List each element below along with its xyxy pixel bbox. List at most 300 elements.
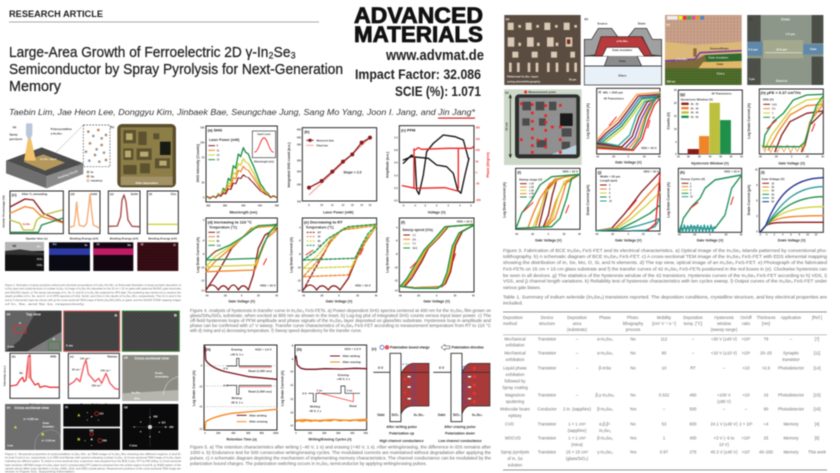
figure 4c: PFM loops: -50 bbox=[476, 182, 480, 185]
figure 3c: EDS cross-section: Gate insulator bbox=[708, 55, 729, 59]
figure 1i: Se elemental map: (i) bbox=[97, 242, 99, 246]
table row 3: Spray coating bbox=[502, 385, 528, 390]
figure 3g: hysteresis window histogram: 35 bbox=[698, 156, 701, 159]
figure 4e: decreasing temperature transfer curves: 20 bbox=[356, 294, 360, 297]
table row 8: Spray pyrolysis bbox=[501, 450, 529, 454]
figure 4e: decreasing temperature transfer curves: -14 bbox=[297, 290, 301, 293]
figure 4c: PFM loops: 200 bbox=[476, 126, 480, 129]
figure 4b: log-log SHG counts: 200 bbox=[297, 184, 302, 187]
figure 4e: decreasing temperature transfer curves: -4 bbox=[298, 226, 301, 229]
figure 4d: increasing temperature transfer curves: Log Drain Current (A) bbox=[196, 237, 200, 273]
figure 4e: decreasing temperature transfer curves: Temperature (°C) bbox=[306, 225, 334, 229]
figure 1j: O elemental map: O bbox=[173, 243, 176, 247]
figure 1f: O 1s XPS spectrum: (f) bbox=[149, 192, 152, 196]
figure 4c: PFM loops: Phase (Degree) bbox=[486, 152, 490, 178]
figure 3d: optical top view: (d) bbox=[749, 17, 752, 21]
device: after erasing pulse: In₂Se₃ bbox=[472, 413, 483, 417]
figure 4c: PFM loops: 0.2 bbox=[394, 187, 398, 190]
figure 3i: sweep range dependence: 0 bbox=[548, 233, 550, 236]
figure 3j: channel length dependence: VDS = 10 V bbox=[643, 169, 659, 173]
figure 2d: cross-sectional view: Grain bbox=[155, 371, 163, 375]
figure 4f: sweep speed transfer curves: -6 bbox=[395, 240, 398, 243]
figure 5a: retention chart: 0 V bbox=[223, 366, 228, 370]
figure 4b: log-log SHG counts: 400 bbox=[297, 144, 302, 147]
figure 4d: increasing temperature transfer curves: 40 bbox=[275, 294, 279, 297]
figure 4f: sweep speed transfer curves: -4 bbox=[395, 226, 398, 229]
table row 5: epitaxy bbox=[508, 413, 523, 418]
device: after erasing pulse: 0 V bbox=[439, 366, 445, 370]
table row 6: Transistor bbox=[538, 422, 557, 426]
figure 3e: measurement points photo: Measurement point bbox=[528, 90, 556, 94]
figure 4 caption: with d) rising and e) decreasing temperature. f) Sweep speed dependency for the transfer curve. bbox=[190, 328, 362, 333]
table row 8: 15 × 15 cm² bbox=[566, 450, 589, 454]
panel: figure 1 bbox=[2, 123, 181, 306]
figure 3l: output curves: 0 bbox=[756, 230, 758, 233]
figure 1i: Se elemental map: Se bbox=[127, 243, 131, 247]
figure 3g: hysteresis window histogram: 5 bbox=[675, 141, 677, 144]
figure 3c: EDS cross-section: Glass bbox=[717, 72, 725, 76]
figure 2g: SAED pattern: (g) bbox=[124, 405, 128, 409]
figure 3g: hysteresis window histogram: 35 - 40 bbox=[691, 107, 699, 110]
figure 3c: EDS cross-section: Source/Drain bbox=[710, 46, 729, 50]
figure 5 caption bbox=[190, 444, 492, 466]
figure 2 caption: Figure 2. Structural properties of polycrystalline In₂Se₃ film. a) TEM image of In₂Se₃ film showing two different regions, A and B, bbox=[5, 452, 181, 456]
panel: figure 5 bbox=[190, 344, 492, 466]
table row 2: exfoliation bbox=[506, 357, 525, 362]
bars bbox=[688, 103, 731, 154]
table row 7: [5] bbox=[815, 436, 819, 440]
figure 3l: output curves: 60 bbox=[771, 201, 775, 204]
figure 4a: SHG spectra bbox=[196, 126, 279, 215]
figure 4d: increasing temperature transfer curves: (d) Increasing to 110 °C bbox=[208, 220, 252, 225]
figure 3h: drain voltage dependence: 0.1 bbox=[772, 108, 776, 111]
figure 2e: HRTEM cross-section: Grain bbox=[43, 422, 50, 425]
table row 2 bbox=[504, 350, 820, 362]
figure 4b: log-log SHG counts bbox=[287, 128, 377, 215]
figure 4b: log-log SHG counts: Integrated SHG count (a.u.) bbox=[287, 142, 291, 188]
figure 3b: device structure schematic: Source bbox=[597, 22, 608, 26]
figure 3l: output curves: 30 bbox=[771, 190, 775, 193]
figure 4b: log-log SHG counts: 12 bbox=[342, 204, 345, 207]
figure 4d: increasing temperature transfer curves: 20 bbox=[257, 294, 260, 297]
figure 4a: SHG spectra: 11 bbox=[217, 149, 220, 152]
figure 5 caption: pulses. c) A schematic diagram depicting the mechanism of implementing memory characteristics. The channel conductance can be modulated by the bbox=[190, 456, 492, 460]
figure 5a: retention chart: 0 bbox=[204, 432, 206, 435]
table header: Application bbox=[781, 315, 802, 320]
figure 4b: log-log SHG counts: 11 bbox=[331, 204, 334, 207]
figure 2c: Raman chart bbox=[68, 353, 119, 407]
figure 3h: drain voltage dependence: 1 bbox=[772, 112, 774, 115]
figure 3f: transfer curves of 42 transistors: 40 bbox=[658, 156, 661, 159]
figure 5b: endurance chart: Erasing bbox=[338, 373, 349, 377]
figure 3h: drain voltage dependence: (h) μFE = 0.37 cm²/Vs bbox=[761, 90, 802, 95]
table header: process bbox=[626, 327, 640, 332]
figure 3l: output curves: 10 bbox=[806, 234, 810, 237]
figure 4d: increasing temperature transfer curves: VDS = 10 V bbox=[260, 284, 276, 288]
figure 4e: decreasing temperature transfer curves: (e) Decreasing to RT bbox=[304, 220, 343, 225]
figure 4f: sweep speed transfer curves: 7.1 bbox=[412, 243, 416, 246]
figure 1a: spray pyrolysis schematic: vacancy bbox=[91, 179, 103, 183]
figure 4e: decreasing temperature transfer curves: -20 bbox=[320, 294, 324, 297]
table row 2: Synaptic bbox=[783, 350, 799, 356]
table row 4: Transistor bbox=[538, 392, 557, 398]
table header: area bbox=[573, 321, 582, 326]
figure 4c: PFM loops: 0.8 bbox=[394, 149, 398, 152]
inset: input laser bbox=[252, 131, 276, 163]
figure 5 caption: 1000 s. b) Endurance test for 500 consecutive writing/erasing cycles. The modulated currents are maintained without degradation after applying the bbox=[190, 450, 492, 455]
table row 3: Liquid phase bbox=[503, 366, 528, 370]
table row 3 bbox=[502, 366, 820, 390]
figure 5 caption: Figure 5. a) The retention characteristics after writing (−40 V, 1 s) and erasing (+40 V, 1 s). After writing/erasing, the difference in IDS remains after bbox=[190, 444, 492, 450]
table row 2: α-In₂Se₃ bbox=[597, 350, 613, 356]
figure 2e: HRTEM cross-section: A bbox=[14, 425, 17, 430]
table header bbox=[503, 315, 822, 332]
figure 4c: PFM loops: (c) PFM bbox=[401, 128, 416, 133]
figure 3j: channel length dependence: Gate Voltage (V) bbox=[615, 239, 642, 243]
table row 1: exfoliation bbox=[506, 342, 525, 348]
device: after erasing pulse: Gate bbox=[438, 413, 446, 417]
figure 2a: top-view TEM with regions: B bbox=[53, 337, 56, 341]
figure 4e: decreasing temperature transfer curves: -6 bbox=[298, 240, 301, 243]
figure 4b: log-log SHG counts: 9 bbox=[308, 204, 310, 207]
table row 3: No bbox=[630, 366, 636, 370]
figure 4a: SHG spectra: 9 bbox=[217, 145, 219, 148]
figure 4a: SHG spectra: 150 bbox=[200, 126, 205, 129]
table row 6: (sapphire) bbox=[568, 428, 587, 433]
table row 6: Memory bbox=[783, 422, 799, 426]
figure 2f: FFT patterns A and B bbox=[63, 404, 120, 450]
figure 4 caption: Figure 4. Analysis of hysteresis in transfer curve in In₂Se₃ FeS-FETs. a) Power-dependent SHG spectra centered at 400 nm for the In₂Se₃ film grown on bbox=[190, 308, 492, 313]
figure 1h: In elemental map: In bbox=[85, 243, 87, 247]
table row 4: Magnetron bbox=[505, 392, 526, 398]
table header: (substrate) bbox=[567, 327, 588, 332]
figure 4f: sweep speed transfer curves: -8 bbox=[395, 253, 398, 256]
figure 5b: endurance chart: -40 V, 1 s bbox=[309, 409, 322, 413]
figure 3f: transfer curves of 42 transistors bbox=[586, 88, 661, 165]
table header: Mobility bbox=[657, 315, 672, 320]
figure 5a: retention chart: 800 bbox=[260, 432, 264, 435]
figure 2e: HRTEM cross-section: boundary bbox=[43, 425, 55, 428]
figure 2a: top-view TEM with regions: A bbox=[19, 321, 22, 325]
table row 6: 24.1 V (±40 V) bbox=[711, 422, 738, 426]
panel: figure 3 bbox=[503, 15, 828, 290]
figure 2e: HRTEM cross-section: B bbox=[41, 431, 44, 436]
figure 3j: channel length dependence: -40 bbox=[595, 233, 599, 236]
table row 2: Mechanical bbox=[504, 350, 526, 356]
figure 3i: sweep range dependence bbox=[503, 168, 581, 243]
figure 1d: In 3d XPS spectrum: In3d bbox=[91, 192, 97, 196]
figure 4c: PFM loops: 2 bbox=[448, 205, 450, 208]
figure 5a: retention chart bbox=[192, 345, 279, 442]
table row 4: β,γ-In₂Se₃ bbox=[595, 392, 615, 398]
figure 1 caption: depth profiles of In, Se, and O. d–f) XPS spectra of In3d, Se3d, and O1s in the depth of In₂Se₃ film, respectively. The h) In and i) Se bbox=[5, 294, 181, 298]
figure 3b: device structure schematic: γ-In₂Se₃ bbox=[616, 39, 629, 43]
figure 5a: retention chart: After erasing bbox=[249, 420, 268, 424]
figure 3h: drain voltage dependence: 0 bbox=[791, 156, 793, 159]
figure 1j: O elemental map: (j) bbox=[141, 242, 143, 246]
figure 3l: output curves: 20 bbox=[771, 186, 775, 189]
figure 1c: atomic percentage chart bbox=[2, 191, 63, 241]
table row 5: 2 in. (sapphire) bbox=[563, 406, 592, 412]
table caption bbox=[503, 294, 828, 306]
figure 2d: cross-sectional view: (d) bbox=[124, 356, 128, 360]
figure 3j: channel length dependence: 8 bbox=[609, 196, 611, 199]
figure 3j: channel length dependence: Length (μm) bbox=[600, 178, 617, 182]
figure 3i: sweep range dependence: ± 50 bbox=[529, 196, 534, 199]
figure 3l: output curves: 0 bbox=[766, 234, 768, 237]
figure 4 caption: phase can be confirmed with ±7 V sweep. Transfer curve characteristics of In₂Se₃ FeS-FET according to measurement temperature from RT to 110 °C bbox=[190, 323, 491, 328]
figure 2e: HRTEM cross-section: 5 nm bbox=[7, 445, 14, 448]
figure 1g: cross-sectional TEM: SiO₂ bbox=[37, 257, 44, 261]
figure 3f: transfer curves of 42 transistors: 20 bbox=[643, 156, 646, 159]
figure 5a: retention chart: 400 bbox=[231, 432, 236, 435]
figure 1c: atomic percentage chart: (c) bbox=[12, 192, 17, 197]
figure 2 caption: for both 5 and 2 nm, respectively. b,c) XRD and Raman with spectra indicating a phase In₂Se₃. d) Cross-sectional TEM image of In₂Se₃ layer bbox=[5, 456, 181, 460]
table row 5: Conductor bbox=[537, 406, 557, 412]
figure 4c: PFM loops: 0 bbox=[436, 205, 438, 208]
header: article type: RESEARCH ARTICLE bbox=[9, 9, 103, 20]
table row 6: 1 × 1 cm² bbox=[568, 422, 586, 426]
table row 8: solution bbox=[508, 462, 523, 468]
table row 5: – bbox=[663, 406, 666, 412]
figure 3k: reliability ten-cycle sweep: 20 bbox=[725, 234, 728, 237]
figure 1f: O 1s XPS spectrum: Binding Energy (eV) bbox=[148, 237, 177, 241]
figure 5b: endurance chart: 300 bbox=[336, 432, 341, 435]
figure 2a: top-view TEM with regions: 2 μm bbox=[7, 344, 15, 348]
figure 3f: transfer curves of 42 transistors: 0 bbox=[628, 156, 630, 159]
figure 3c: EDS cross-section: γ-In₂Se₃ bbox=[676, 57, 688, 61]
table row 3: Transistor bbox=[538, 366, 557, 370]
figure 3l: output curves: Drain Current (μA) bbox=[747, 185, 751, 215]
figure 4a: SHG spectra: 25 bbox=[202, 181, 205, 184]
table row 1: Mechanical bbox=[504, 336, 526, 342]
figure 3g: hysteresis window histogram: 45 - 50 bbox=[691, 116, 699, 119]
figure 4e: decreasing temperature transfer curves bbox=[289, 218, 378, 303]
figure 2e: HRTEM cross-section bbox=[5, 404, 61, 450]
figure 3k: reliability ten-cycle sweep: 40 bbox=[740, 234, 743, 237]
figure 5a: retention chart: -11 bbox=[199, 406, 203, 409]
figure 4a: SHG spectra: 13 bbox=[217, 154, 220, 157]
figure 4b: log-log SHG counts: 15 bbox=[369, 204, 372, 207]
table row 7: Yes bbox=[630, 436, 636, 440]
table header: Hysteresis bbox=[714, 315, 734, 320]
journal metrics bbox=[355, 48, 484, 99]
figure 3a: patterned islands micrograph bbox=[504, 15, 581, 85]
table row 3: Photodetector bbox=[778, 366, 805, 370]
table row 8 bbox=[501, 450, 827, 468]
figure 4b: log-log SHG counts: 150 bbox=[297, 200, 302, 203]
figure 2d: cross-sectional view: Cross-sectional view bbox=[134, 356, 169, 360]
title: Semiconductor by Spray Pyrolysis for Next-Generation bbox=[9, 61, 343, 78]
figure 2a: magnified region A bbox=[64, 311, 120, 351]
figure 4e: decreasing temperature transfer curves: Gate Voltage (V) bbox=[326, 299, 352, 303]
figure 2c: Raman chart: 209 cm⁻¹ bbox=[92, 384, 102, 388]
figure 3l: output curves: 8 bbox=[799, 234, 801, 237]
figure 3l: output curves: -2 bbox=[759, 234, 762, 237]
figure 4e: decreasing temperature transfer curves: -8 bbox=[298, 253, 301, 256]
table row 2: <10 V (±10 V) bbox=[711, 350, 738, 356]
figure 3l: output curves: 10 bbox=[771, 182, 775, 185]
figure 3g: hysteresis window histogram: 15 bbox=[674, 115, 677, 118]
figure 4c: PFM loops: Voltage (V) bbox=[428, 211, 446, 215]
title bbox=[9, 44, 343, 95]
figure 1b: wafer photograph: (b) bbox=[110, 125, 114, 129]
figure 1g: cross-sectional TEM: (g) bbox=[12, 243, 16, 247]
figure 3l: output curves: (l) bbox=[761, 170, 765, 175]
figure 4c: PFM loops: 0.0 bbox=[394, 200, 398, 203]
table row 4: ≈100 V bbox=[717, 392, 731, 398]
figure 3 caption: FeS-FETs on 15 cm × 15 cm glass substrate and f) the transfer curves of 42 In₂Se₃ FeS-FETs positioned in the red boxes in (e). Clockwise hysteresis can bbox=[503, 266, 828, 272]
figure 3e: measurement points photo: (e) bbox=[505, 91, 509, 95]
figure 3b: device structure schematic: Glass bbox=[618, 73, 627, 77]
table row 5: Yes bbox=[630, 406, 636, 412]
figure 1c: atomic percentage chart: Atomic Percentage (%) bbox=[2, 195, 6, 228]
figure 3a: patterned islands micrograph: 50 μm bbox=[569, 79, 577, 82]
figure 3f: transfer curves of 42 transistors: Gate Voltage (V) bbox=[615, 161, 642, 165]
figure 4e: decreasing temperature transfer curves: RT bbox=[318, 231, 321, 234]
figure 5a: retention chart: 1000 bbox=[273, 432, 279, 435]
figure 3j: channel length dependence: -20 bbox=[611, 233, 615, 236]
figure 1e: Se 3d XPS spectrum: Se3d bbox=[131, 192, 138, 196]
table row 2: Transistor bbox=[538, 350, 557, 356]
figure 3k: reliability ten-cycle sweep: Sweep Cycles (#) bbox=[681, 177, 705, 181]
table header: [cm² V⁻¹ s⁻¹] bbox=[652, 321, 676, 326]
figure 5b: endurance chart: +40 V, 1 s bbox=[337, 377, 350, 381]
figure 3d: optical top view: Gate bbox=[810, 47, 817, 51]
table row 1: >10⁸ bbox=[742, 336, 751, 342]
figure 5b: endurance chart: 0 bbox=[295, 432, 297, 435]
figure 2f: FFT patterns A and B: A bbox=[77, 413, 80, 418]
figure 3l: output curves: 12 bbox=[815, 234, 818, 237]
figure 3k: reliability ten-cycle sweep: 0 bbox=[709, 234, 711, 237]
figure 3 caption bbox=[503, 248, 828, 290]
figure 2c: Raman chart: (c) bbox=[70, 354, 74, 358]
table row 1 bbox=[504, 336, 819, 348]
table header: Photo- bbox=[627, 315, 640, 320]
figure 5c: polarization mechanism schematic bbox=[372, 344, 490, 443]
figure 4c: PFM loops: Amplitude (a.u.) bbox=[385, 152, 389, 178]
panel: figure 2 bbox=[2, 311, 181, 473]
figure 4e: decreasing temperature transfer curves: 40 bbox=[375, 294, 378, 297]
table row 3: β-InSe bbox=[599, 366, 612, 370]
figure 5b: endurance chart: 400 bbox=[350, 432, 355, 435]
figure 1 caption: of In, Se, and Se 1s, respectively. bbox=[5, 302, 85, 306]
table row 2: – bbox=[692, 350, 695, 356]
device: after writing pulse: After writing pulse bbox=[386, 425, 417, 429]
figure 3c: EDS cross-section: Gate bbox=[717, 62, 724, 66]
figure 1f: O 1s XPS spectrum bbox=[147, 191, 178, 241]
table row 3: <10 bbox=[742, 366, 750, 370]
table row 4: 16 bbox=[764, 392, 769, 398]
table row 5: – bbox=[723, 406, 726, 412]
figure 1d: In 3d XPS spectrum bbox=[69, 191, 100, 241]
figure 1 caption: and SiNₓ/SiO₂ layers. c) The atomic percentage of In, Se, O, and Si in In₂Se₃ film analyzed by XPS data. The sputtering was carried out to measure the bbox=[5, 290, 181, 294]
journal logo: ADVANCED bbox=[354, 3, 483, 28]
table row 7: 1 × 1 cm² bbox=[568, 436, 586, 440]
figure 1b: wafer photograph bbox=[110, 124, 176, 187]
figure 4c: PFM loops: 0 bbox=[476, 171, 478, 174]
table row 7: 1 bbox=[663, 436, 666, 440]
figure 5b: endurance chart: VGS = 1.0 V bbox=[344, 347, 361, 351]
figure 3j: channel length dependence: 0 bbox=[628, 233, 630, 236]
title: Memory bbox=[9, 78, 61, 95]
figure 4e: decreasing temperature transfer curves: 110 bbox=[318, 244, 322, 247]
table header: [Ref.] bbox=[812, 315, 822, 320]
figure 4a: SHG spectra: 396 bbox=[223, 204, 228, 207]
figure 3j: channel length dependence: Drain Current (μA) bbox=[586, 185, 590, 215]
figure 4f: sweep speed transfer curves: -12 bbox=[394, 280, 398, 283]
device: after erasing pulse: SiO₂ bbox=[453, 413, 461, 417]
figure 5 caption: polarization bound charges. The polarization switching occurs in In₂Se₃ semiconductor by applying writing/erasing pulses. bbox=[190, 461, 427, 466]
figure 4a: SHG spectra: 392 bbox=[206, 204, 211, 207]
figure 1c: atomic percentage chart: After Yₛ annealing bbox=[22, 192, 47, 196]
table row 3: RT bbox=[690, 366, 696, 370]
figure 1c: atomic percentage chart: In₂Se₃ bbox=[23, 223, 30, 226]
figure 3d: optical top view: 1.5 μm bbox=[786, 32, 795, 36]
figure 1a: spray pyrolysis schematic: In bbox=[91, 170, 93, 174]
figure 5a: retention chart: Retention Time (s) bbox=[226, 438, 257, 442]
table row 1: ≈30 V (±40 V) bbox=[711, 336, 737, 342]
table row 5: – bbox=[745, 406, 748, 412]
figure 5b: endurance chart: After erasing bbox=[342, 360, 361, 364]
figure 2g: SAED pattern: 110 bbox=[161, 421, 166, 424]
figure 3k: reliability ten-cycle sweep: VDS = 10 V bbox=[724, 169, 740, 173]
figure 4a: SHG spectra: 100 bbox=[200, 141, 205, 144]
figure 4f: sweep speed transfer curves: 20 bbox=[454, 294, 457, 297]
figure 4b: log-log SHG counts: 600 bbox=[297, 128, 302, 131]
table row 3: – bbox=[723, 366, 726, 370]
device: after writing pulse: e⁻ e⁻ e⁻ bbox=[402, 363, 412, 366]
figure 2b: XRD chart bbox=[2, 353, 59, 407]
table header: Device bbox=[541, 315, 554, 320]
figure 2 caption bbox=[5, 452, 181, 473]
figure 5b: endurance chart: 0 V bbox=[302, 391, 307, 395]
figure 2f: FFT patterns A and B: (f) bbox=[65, 405, 68, 409]
authors: Taebin Lim, Jae Heon Lee, Donggyu Kim, Jinbaek Bae, Seungchae Jung, Sang Mo Yang, Joon I. Jang, and Jin Jang* bbox=[9, 107, 476, 117]
table row 1: 79 bbox=[764, 336, 769, 342]
figure 3f: transfer curves of 42 transistors: Log Drain Current (A) bbox=[586, 103, 590, 139]
figure 2a: magnified region A: 5 nm bbox=[66, 344, 73, 348]
table row 1: No bbox=[630, 336, 636, 342]
figure 5b: endurance chart: (b) bbox=[297, 347, 302, 352]
figure 5c: polarization mechanism schematic: Polarization direction bbox=[452, 345, 484, 349]
figure 3f: transfer curves of 42 transistors: -20 bbox=[612, 156, 616, 159]
figure 5a: retention chart: After writing bbox=[249, 413, 267, 417]
figure 2a: top-view TEM with regions: Top view bbox=[26, 312, 41, 316]
table header: window bbox=[717, 321, 732, 326]
device: after writing pulse: High channel conductance bbox=[379, 439, 424, 443]
figure 5b: endurance chart: 200 bbox=[322, 432, 327, 435]
figure 1b: wafer photograph: After deposition bbox=[135, 181, 158, 185]
journal logo bbox=[354, 3, 483, 47]
figure 4d: increasing temperature transfer curves: 110 bbox=[217, 244, 221, 247]
figure 5a: retention chart: Writing bbox=[232, 396, 242, 400]
figure 4b: log-log SHG counts: Measured data bbox=[316, 139, 334, 142]
figure 3i: sweep range dependence: -40 bbox=[515, 233, 519, 236]
figure 3g: hysteresis window histogram: (g) bbox=[680, 91, 686, 96]
table row 2: No bbox=[630, 350, 636, 356]
figure 3f: transfer curves of 42 transistors: W/L = 20/5 μm bbox=[603, 90, 623, 94]
figure 4a: SHG spectra: SHG Intensity [Counts] bbox=[196, 144, 200, 182]
table row 8: 0.97 bbox=[660, 450, 669, 454]
figure 3g: hysteresis window histogram: 45 bbox=[719, 156, 723, 159]
figure 2d: cross-sectional view bbox=[122, 355, 178, 401]
figure 4 caption: glass/SiNₓ/SiOₓ substrate, when excited at 800 nm as shown in the inset. b) Log-log plot of integrated SHG counts versus input laser power. c) The bbox=[190, 313, 492, 318]
table row 8: This work bbox=[808, 450, 827, 454]
table header: On/off bbox=[740, 315, 752, 320]
table header: [nm] bbox=[762, 321, 770, 326]
figure 3a: patterned islands micrograph: using photolithography bbox=[507, 79, 541, 83]
